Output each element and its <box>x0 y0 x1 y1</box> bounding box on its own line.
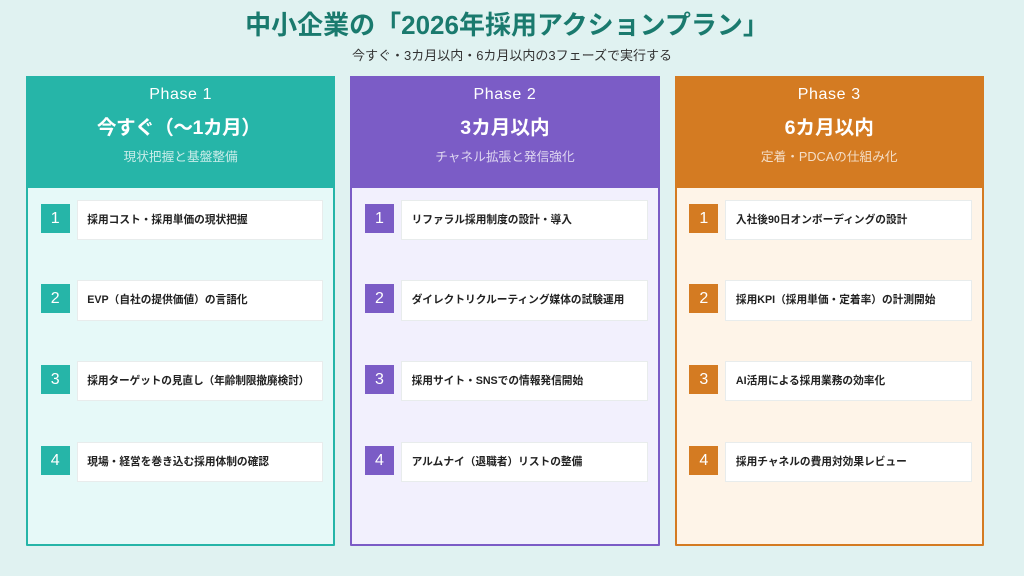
phase 1 header: 現状把握と基盤整備 <box>124 150 238 164</box>
phase 3 step 1 <box>689 200 972 240</box>
phase 3 step 1: 1 <box>699 210 708 227</box>
panel: phase 3 <box>675 76 984 546</box>
phase 3 header: 6カ月以内 <box>785 117 874 139</box>
phase 2 step 4: 4 <box>375 452 384 469</box>
phase 2 header: Phase 2 <box>473 86 536 103</box>
phase 3 step 2: 2 <box>699 290 708 307</box>
phase 2 step 3 <box>365 361 648 401</box>
title: 中小企業の「2026年採用アクションプラン」 <box>245 10 769 40</box>
phase 3 step 3: AI活用による採用業務の効率化 <box>736 375 885 387</box>
phase 3 header <box>675 76 984 188</box>
phase 3 header: 定着・PDCAの仕組み化 <box>761 150 898 164</box>
phase 2 header <box>350 76 660 188</box>
phase 2 step 4 <box>365 442 648 482</box>
phase 1 step 1 <box>41 200 323 240</box>
phase 1 step 1: 採用コスト・採用単価の現状把握 <box>87 214 248 226</box>
phase 3 header: Phase 3 <box>798 86 861 103</box>
phase 2 header: チャネル拡張と発信強化 <box>435 150 575 164</box>
phase 1 step 2: 2 <box>51 290 60 307</box>
subtitle: 今すぐ・3カ月以内・6カ月以内の3フェーズで実行する <box>352 48 672 63</box>
phase 2 step 2 <box>365 280 648 321</box>
phase 1 header: Phase 1 <box>149 86 212 103</box>
panel: phase 2 <box>350 76 660 546</box>
phase 3 step 3: 3 <box>699 371 708 388</box>
phase 2 header: 3カ月以内 <box>460 117 550 139</box>
phase 1 step 1: 1 <box>51 210 60 227</box>
phase 3 step 1: 入社後90日オンボーディングの設計 <box>736 214 907 226</box>
phase 1 step 3: 採用ターゲットの見直し（年齢制限撤廃検討） <box>87 375 309 387</box>
phase 2 step 2: 2 <box>375 290 384 307</box>
phase 1 step 4 <box>41 442 323 482</box>
phase 1 header <box>26 76 335 188</box>
phase 2 step 1 <box>365 200 648 240</box>
phase 3 step 2 <box>689 280 972 321</box>
phase 1 header: 今すぐ（〜1カ月） <box>97 117 260 139</box>
phase 2 step 3: 3 <box>375 371 384 388</box>
phase 3 step 4 <box>689 442 972 482</box>
phase 1 step 2 <box>41 280 323 321</box>
phase 2 step 4: アルムナイ（退職者）リストの整備 <box>412 456 582 468</box>
phase 3 step 2: 採用KPI（採用単価・定着率）の計測開始 <box>736 294 935 306</box>
phase 3 step 3 <box>689 361 972 401</box>
phase 3 step 4: 採用チャネルの費用対効果レビュー <box>736 456 907 468</box>
phase 2 step 3: 採用サイト・SNSでの情報発信開始 <box>412 375 583 387</box>
phase 1 step 4: 現場・経営を巻き込む採用体制の確認 <box>87 456 269 468</box>
phase 2 step 1: 1 <box>375 210 384 227</box>
phase 3 step 4: 4 <box>699 452 708 469</box>
phase 2 step 1: リファラル採用制度の設計・導入 <box>412 214 572 226</box>
phase 1 step 3: 3 <box>51 371 60 388</box>
phase 1 step 2: EVP（自社の提供価値）の言語化 <box>87 294 248 306</box>
phase 1 step 3 <box>41 361 323 401</box>
panel: phase 1 <box>26 76 335 546</box>
phase 1 step 4: 4 <box>51 452 60 469</box>
phase 2 step 2: ダイレクトリクルーティング媒体の試験運用 <box>412 294 624 306</box>
